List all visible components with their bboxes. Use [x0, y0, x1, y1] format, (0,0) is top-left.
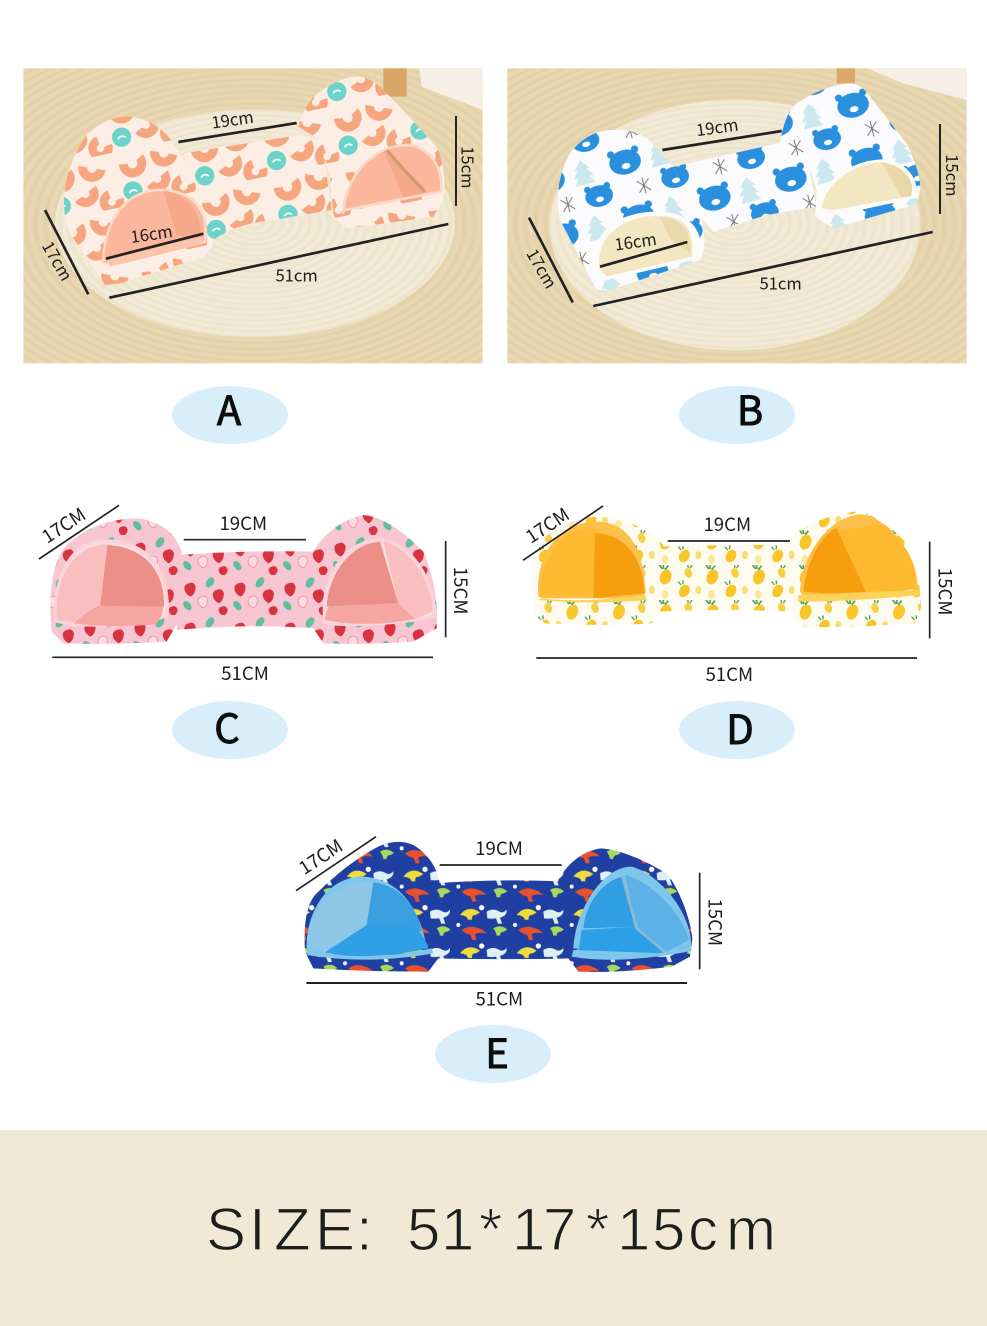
dimension: 15cm: 15cm: [457, 146, 481, 189]
product C: tunnel bed: [50, 515, 437, 644]
dimension: 51cm: [593, 232, 933, 306]
dimension: 15cm: 15cm: [941, 154, 965, 197]
dimension: 15CM: [446, 541, 475, 637]
badge: C: [172, 697, 288, 759]
dimension: 19CM: 19CM: [219, 509, 267, 536]
dimension: 19CM: [668, 510, 790, 541]
badge: B: [679, 379, 795, 444]
dimension: 17CM: [293, 832, 376, 891]
dimension: 51CM: 51CM: [475, 984, 523, 1011]
panel: product C strawberry: [36, 500, 475, 686]
dimension: 17cm: 17cm: [521, 244, 563, 293]
product A: tunnel bed: [64, 77, 444, 285]
dimension: 15CM: 15CM: [702, 898, 729, 946]
dimension: 17CM: [36, 500, 119, 559]
dimension: 51cm: [109, 224, 448, 298]
badge: D: [679, 698, 795, 759]
product B: tunnel bed: [558, 83, 920, 290]
dimension: 16cm: [600, 226, 687, 267]
dimension: 19CM: 19CM: [703, 510, 751, 537]
panel: product E dinosaur: [293, 832, 729, 1011]
dimension: 19cm: 19cm: [694, 112, 740, 141]
woven mat: [23, 68, 483, 363]
dimension: 15cm: [940, 124, 965, 214]
panel: product D pineapple: [520, 500, 959, 687]
badge: A: [172, 379, 288, 444]
dimension: 15CM: [930, 542, 959, 638]
panel: product A photo: [23, 68, 483, 363]
badge: B: B: [737, 379, 763, 437]
dimension: 15CM: 15CM: [932, 568, 959, 616]
badge: E: E: [485, 1022, 509, 1080]
panel: product B photo: [507, 68, 967, 363]
badge: E: [435, 1022, 551, 1083]
dimension: 15cm: [456, 116, 481, 206]
dimension: 15CM: [700, 873, 729, 969]
dimension: 17cm: 17cm: [37, 236, 79, 285]
dimension: 15CM: 15CM: [448, 567, 475, 615]
footer band: [0, 1130, 987, 1326]
dimension: 16cm: 16cm: [129, 218, 174, 248]
badge: C: C: [214, 697, 240, 755]
badge: A: A: [217, 379, 242, 437]
dimension: 19cm: [662, 112, 782, 150]
dimension: 17cm: [37, 210, 88, 294]
dimension: 51CM: 51CM: [705, 660, 753, 687]
dimension: 17cm: [521, 218, 573, 302]
product E: tunnel bed: [305, 842, 692, 972]
dimension: 51CM: 51CM: [221, 659, 269, 686]
woven mat: [507, 68, 967, 363]
dimension: 17CM: 17CM: [293, 832, 348, 880]
dimension: 51cm: 51cm: [759, 271, 802, 295]
badge: D: D: [726, 698, 754, 756]
dimension: 16cm: 16cm: [613, 226, 658, 256]
product D: tunnel bed: [533, 512, 921, 627]
dimension: 16cm: [106, 218, 203, 259]
dimension: 51cm: 51cm: [275, 263, 318, 287]
dimension: 17CM: 17CM: [36, 500, 91, 549]
dimension: 19CM: 19CM: [475, 834, 523, 861]
size heading: SIZE: 51*17*15cm: [206, 1196, 776, 1263]
dimension: 19CM: [184, 509, 306, 540]
dimension: 17CM: [520, 500, 603, 560]
dimension: 19CM: [440, 834, 562, 865]
dimension: 19cm: [178, 104, 297, 142]
dimension: 17CM: 17CM: [520, 500, 574, 549]
dimension: 19cm: 19cm: [210, 104, 255, 134]
